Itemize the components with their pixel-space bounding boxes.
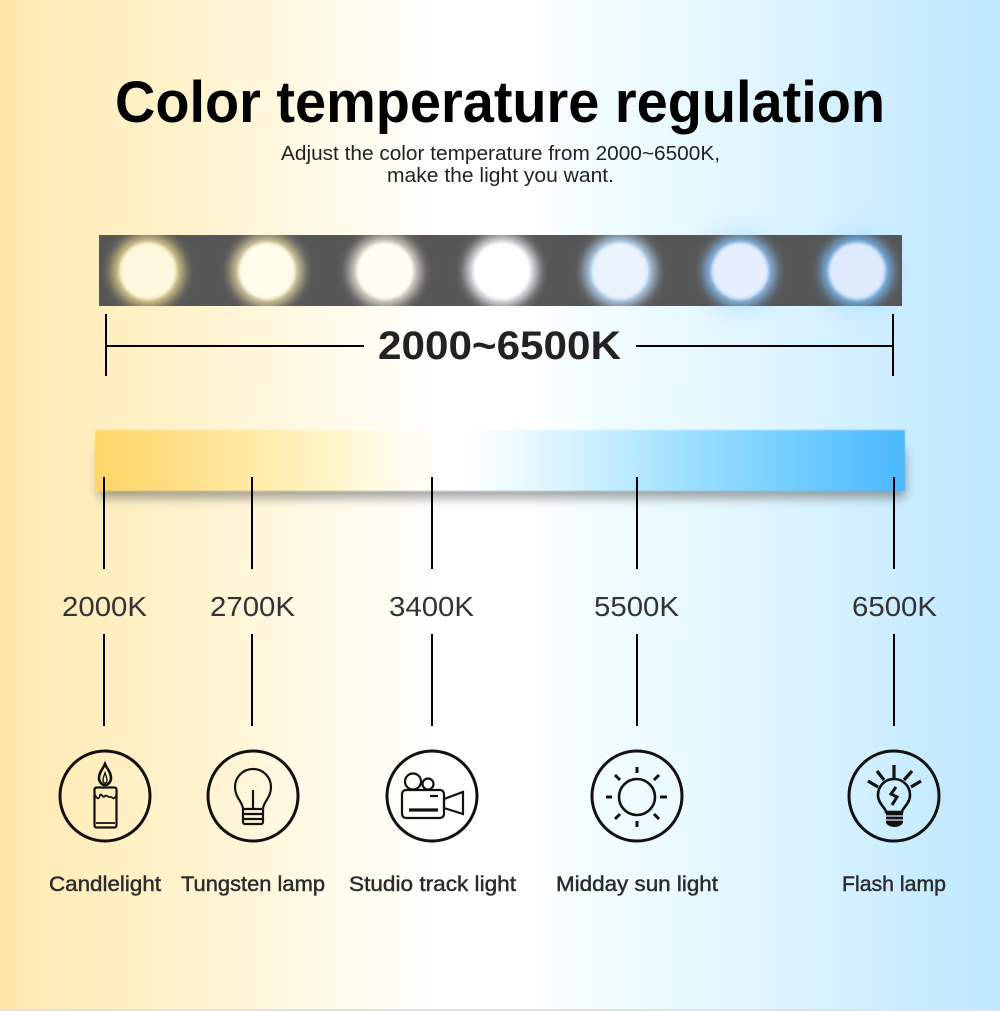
subtitle <box>281 143 720 187</box>
LED glows <box>112 235 893 307</box>
icon: tungsten bulb <box>208 751 298 841</box>
kelvin labels: 2700K <box>210 591 295 622</box>
kelvin labels <box>62 591 937 622</box>
icon: sun <box>592 751 682 841</box>
kelvin labels: 6500K <box>852 591 937 622</box>
connector lines from labels to icons <box>104 634 894 726</box>
icon captions: Tungsten lamp <box>181 873 325 896</box>
icon captions: Candlelight <box>49 873 161 896</box>
icon: flash bulb <box>849 751 939 841</box>
LED discs <box>120 242 886 300</box>
icon captions: Midday sun light <box>556 873 718 896</box>
kelvin labels: 2000K <box>62 591 147 622</box>
subtitle: Adjust the color temperature from 2000~6500K, <box>281 143 720 165</box>
color temperature gradient bar <box>95 430 905 498</box>
LED strip showing seven color temperatures <box>99 229 902 313</box>
kelvin labels: 5500K <box>594 591 679 622</box>
icon: candle <box>60 751 150 841</box>
icon captions: Flash lamp <box>842 873 946 896</box>
icon captions: Studio track light <box>349 873 516 896</box>
range bracket: 2000~6500K: 2000~6500K <box>378 324 621 368</box>
icon captions <box>49 873 946 896</box>
subtitle: make the light you want. <box>387 165 614 187</box>
icon: studio camera <box>387 751 477 841</box>
kelvin labels: 3400K <box>389 591 474 622</box>
blue halo behind cool LEDs <box>698 229 899 313</box>
tick lines from bar to labels <box>104 477 894 569</box>
title: Color temperature regulation <box>115 70 885 135</box>
